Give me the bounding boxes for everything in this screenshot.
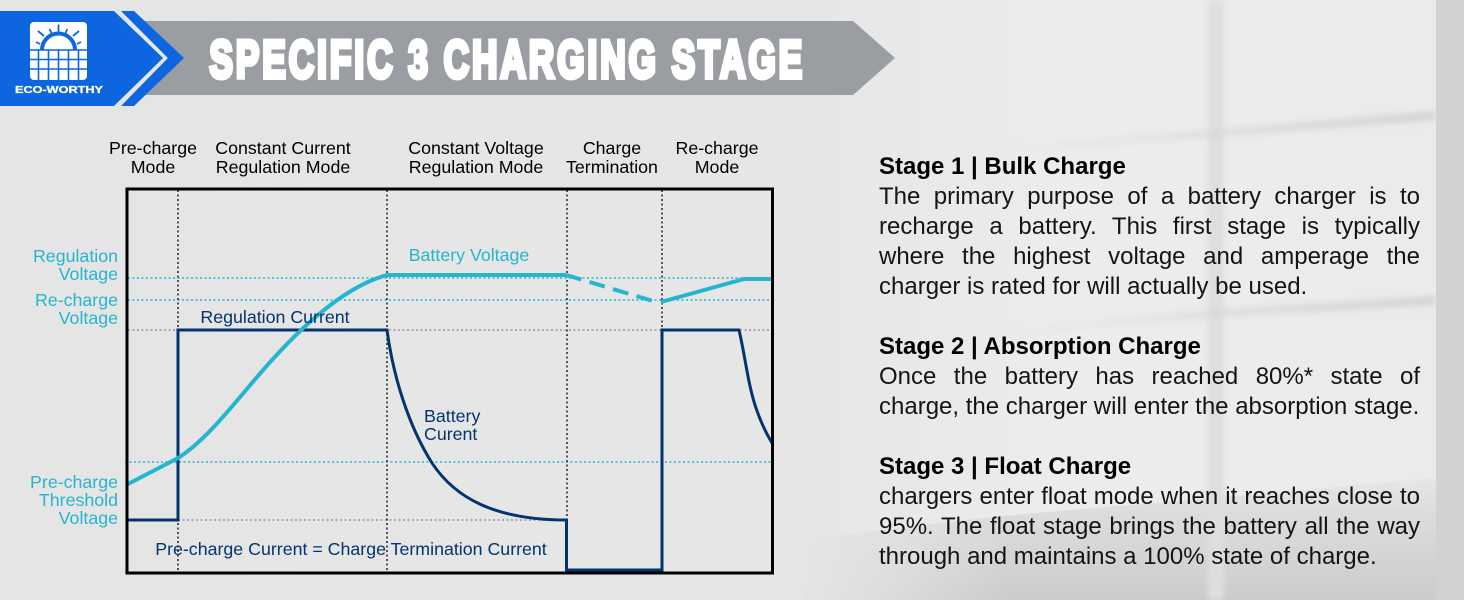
curve labels: Regulation Current [200, 307, 350, 327]
stage 3 text: 95%. The float stage brings the battery all the way [879, 513, 1420, 540]
curve labels: Battery [424, 406, 480, 426]
voltage axis labels: Voltage [59, 308, 118, 328]
voltage axis labels: Voltage [59, 264, 118, 284]
battery voltage curve [128, 275, 771, 484]
stage 1 text [879, 153, 1420, 300]
stage column headings: Mode [695, 157, 739, 177]
stage 3 text: chargers enter float mode when it reaches close to [879, 483, 1420, 510]
stage 2 text [879, 333, 1420, 420]
stage column headings: Charge [583, 138, 641, 158]
stage column headings: Constant Voltage [408, 138, 544, 158]
stage 1 text: where the highest voltage and amperage the [879, 243, 1420, 270]
voltage axis labels: Re-charge [35, 290, 118, 310]
title: SPECIFIC 3 CHARGING STAGE [210, 29, 805, 90]
stage 1 text: recharge a battery. This first stage is typically [879, 213, 1420, 240]
stage 2 text: Stage 2 | Absorption Charge [879, 333, 1201, 360]
chart frame [127, 189, 772, 573]
stage 1 text: Stage 1 | Bulk Charge [879, 153, 1126, 180]
stage 1 text: charger is rated for will actually be used. [879, 273, 1307, 300]
curve labels: Pre-charge Current = Charge Termination Current [155, 539, 547, 559]
blue logo arrow [0, 11, 184, 106]
stage column headings: Regulation Mode [409, 157, 543, 177]
curve labels: Battery Voltage [409, 245, 529, 265]
stage column headings: Re-charge [675, 138, 759, 158]
voltage axis labels: Pre-charge [30, 472, 118, 492]
stage column headings: Constant Current [215, 138, 351, 158]
stage column headings: Pre-charge [109, 138, 197, 158]
curve labels [155, 245, 547, 559]
voltage axis labels [30, 246, 118, 528]
stage 3 text: through and maintains a 100% state of charge. [879, 543, 1377, 570]
stage column headings: Termination [566, 157, 658, 177]
stage column headings [109, 138, 759, 177]
voltage axis labels: Regulation [33, 246, 118, 266]
battery current curve [128, 330, 772, 570]
stage 1 text: The primary purpose of a battery charger is to [879, 183, 1420, 210]
logo icon: solar panel with sun [30, 22, 87, 80]
stage 2 text: Once the battery has reached 80%* state of [879, 363, 1420, 390]
stage 2 text: charge, the charger will enter the absorption stage. [879, 393, 1419, 420]
voltage axis labels: Voltage [59, 508, 118, 528]
guide lines [125, 190, 771, 572]
curve labels: Curent [424, 424, 477, 444]
stage 3 text [879, 453, 1420, 570]
background wall with window shadow [866, 0, 1464, 600]
voltage axis labels: Threshold [39, 490, 118, 510]
stage 3 text: Stage 3 | Float Charge [879, 453, 1131, 480]
charging stage chart [30, 138, 774, 574]
logo wordmark: ECO-WORTHY [15, 84, 103, 96]
header banner [0, 11, 895, 106]
stage column headings: Regulation Mode [216, 157, 350, 177]
grey title ribbon [136, 21, 895, 95]
stage column headings: Mode [131, 157, 175, 177]
